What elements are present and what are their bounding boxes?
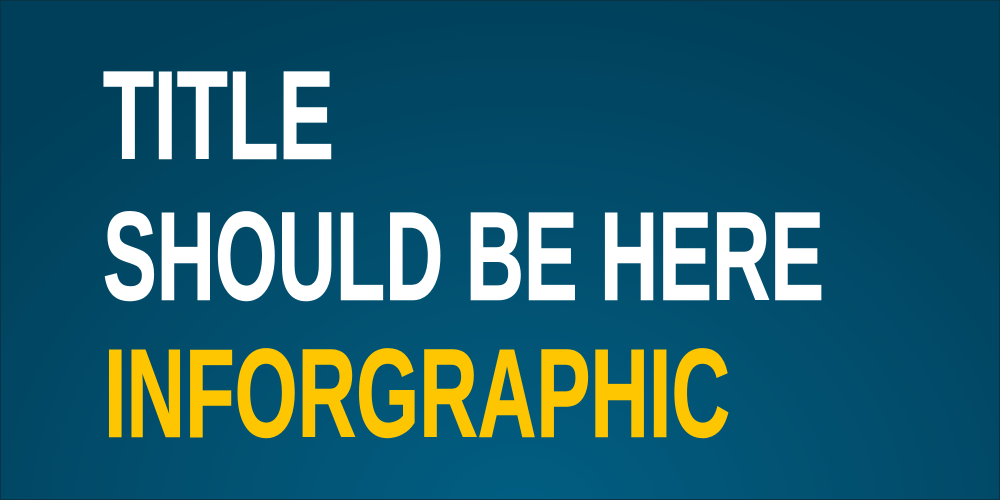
title line 1: TITLE [103, 46, 334, 186]
